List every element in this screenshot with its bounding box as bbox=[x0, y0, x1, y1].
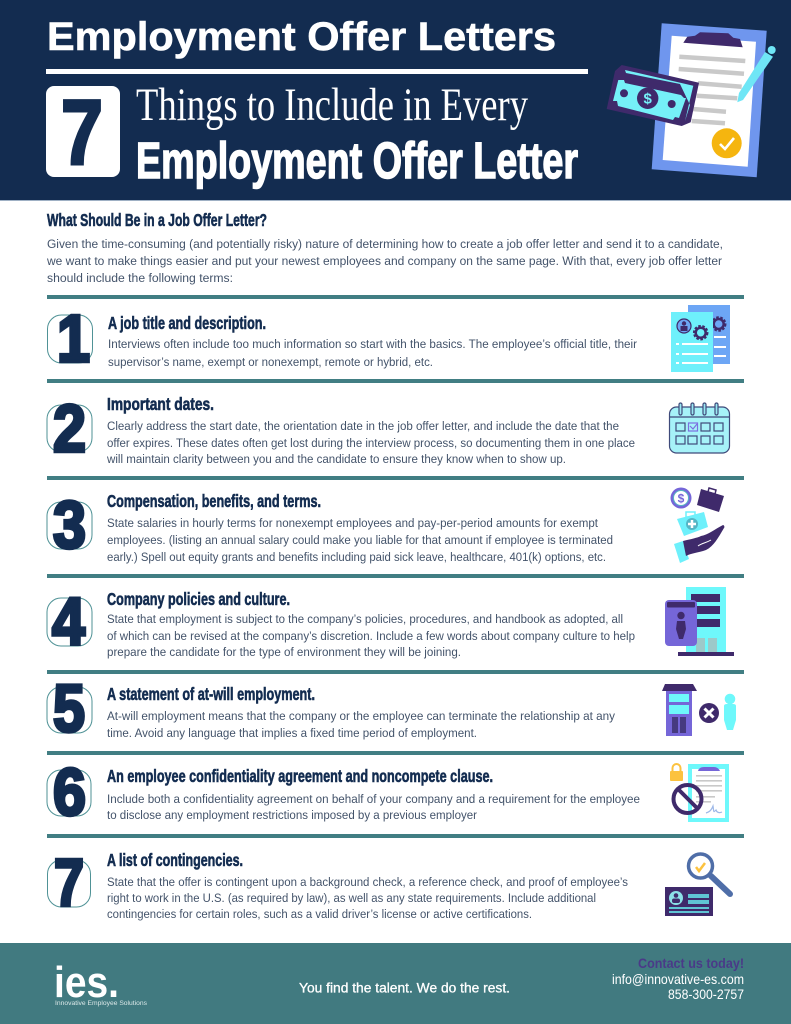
contact details: Contact us today! bbox=[638, 955, 744, 971]
footer band bbox=[0, 943, 791, 1024]
icon: benefits in hand: $ bbox=[678, 492, 685, 506]
tagline: You find the talent. We do the rest. bbox=[299, 980, 510, 996]
item 1 body: supervisor’s name, exempt or nonexempt, remote or hybrid, etc. bbox=[108, 355, 433, 369]
icon: calendar bbox=[670, 403, 730, 453]
item 2 body: Clearly address the start date, the orientation date in the job offer letter, and include the date that the bbox=[107, 419, 619, 433]
subtitle line two: Employment Offer Letter bbox=[136, 132, 578, 189]
title: Employment Offer Letters bbox=[47, 15, 556, 59]
item 1 heading: A job title and description. bbox=[108, 313, 266, 333]
icon: building, cross and person bbox=[662, 684, 736, 736]
item 5 heading: A statement of at-will employment. bbox=[107, 684, 315, 704]
item 5 body bbox=[107, 709, 616, 740]
icon: documents with gears bbox=[671, 305, 730, 372]
item 2 bbox=[47, 392, 730, 466]
logo: ies. bbox=[54, 958, 119, 1007]
contact details: 858-300-2757 bbox=[668, 986, 744, 1002]
number badge 3: 3 bbox=[53, 488, 86, 563]
icon: building with handbook bbox=[665, 587, 734, 656]
item 4 body: prepare the candidate for the type of environment they will be joining. bbox=[107, 645, 461, 659]
item 5 body: time. Avoid any language that implies a fixed time period of employment. bbox=[107, 726, 477, 740]
item 2 heading: Important dates. bbox=[107, 394, 214, 414]
item 1 body: Interviews often include too much information so start with the basics. The employee’s official title, their bbox=[108, 337, 637, 351]
contact details: info@innovative-es.com bbox=[612, 971, 744, 987]
icon: clipboard with money and pen: $ bbox=[644, 90, 653, 108]
item 4 body: of which can be revised at the company’s discretion. Include a few words about company culture to help bbox=[107, 629, 635, 643]
item 5 bbox=[47, 672, 736, 746]
number badge 7: 7 bbox=[54, 846, 84, 920]
item 3 heading: Compensation, benefits, and terms. bbox=[107, 491, 321, 511]
number badge 4: 4 bbox=[52, 584, 85, 660]
number seven badge bbox=[46, 82, 120, 184]
item 7 body: contingencies for certain roles, such as a valid driver’s license or active certifications. bbox=[107, 907, 532, 921]
intro heading: What Should Be in a Job Offer Letter? bbox=[47, 210, 267, 230]
logo: Innovative Employee Solutions bbox=[55, 1000, 148, 1007]
item 1 bbox=[48, 302, 730, 376]
number badge 2: 2 bbox=[53, 392, 86, 466]
icon: confidential clipboard bbox=[670, 764, 729, 822]
item 6 bbox=[47, 755, 729, 830]
icon: benefits in hand bbox=[670, 488, 724, 563]
item 4 body bbox=[107, 612, 635, 659]
item 7 bbox=[48, 846, 730, 921]
item 6 body bbox=[107, 792, 640, 822]
item 5 body: At-will employment means that the company or the employee can terminate the relationship at any bbox=[107, 709, 616, 723]
item 3 body: early.) Spell out equity grants and benefits including paid sick leave, healthcare, 401(k) options, etc. bbox=[107, 550, 606, 564]
item 1 body bbox=[108, 337, 637, 369]
item 3 bbox=[47, 488, 724, 564]
item 2 body: will maintain clarity between you and the candidate to ensure they know when to show up. bbox=[106, 452, 566, 466]
section dividers bbox=[47, 295, 744, 838]
item 4 heading: Company policies and culture. bbox=[107, 589, 290, 609]
item 2 body: offer expires. These dates often get lost during the interview process, so documenting them in one place bbox=[107, 436, 635, 450]
subtitle line one: Things to Include in Every bbox=[136, 79, 528, 131]
header banner bbox=[0, 0, 791, 201]
icon: magnifier and id card bbox=[665, 854, 730, 916]
item 2 body bbox=[106, 419, 635, 466]
item 4 body: State that employment is subject to the company’s policies, procedures, and handbook as adopted, all bbox=[107, 612, 623, 626]
item 3 body: State salaries in hourly terms for nonexempt employees and pay-per-period amounts for exempt bbox=[107, 516, 599, 530]
intro text: we want to make things easier and put your newest employees and company on the same page. With that, every job offer letter bbox=[46, 254, 722, 268]
intro text: Given the time-consuming (and potentially risky) nature of determining how to create a job offer letter and send it to a candidate, bbox=[47, 237, 723, 251]
item 7 body: right to work in the U.S. (as required by law), as well as any state requirements. Include additional bbox=[107, 891, 596, 905]
item 7 body: State that the offer is contingent upon a background check, a reference check, and proof of employee’s bbox=[107, 875, 628, 889]
icon: clipboard with money and pen bbox=[607, 23, 776, 177]
item 6 body: to disclose any employment restrictions imposed by a previous employer bbox=[107, 808, 477, 822]
number badge 6: 6 bbox=[53, 755, 86, 830]
item 7 heading: A list of contingencies. bbox=[107, 850, 243, 870]
number badge 5: 5 bbox=[53, 672, 85, 746]
item 4 bbox=[47, 584, 734, 660]
item 3 body: employees. (listing an annual salary could make you liable for that amount if employee is terminated bbox=[107, 533, 613, 547]
item 6 body: Include both a confidentiality agreement on behalf of your company and a requirement for the employee bbox=[107, 792, 640, 806]
contact details bbox=[612, 955, 744, 1002]
intro text: should include the following terms: bbox=[47, 271, 233, 285]
item 6 heading: An employee confidentiality agreement and noncompete clause. bbox=[107, 766, 493, 786]
item 3 body bbox=[107, 516, 613, 564]
number badge 1: 1 bbox=[57, 302, 90, 376]
intro text bbox=[46, 237, 723, 285]
item 7 body bbox=[107, 875, 628, 921]
number seven badge: 7 bbox=[61, 82, 103, 184]
